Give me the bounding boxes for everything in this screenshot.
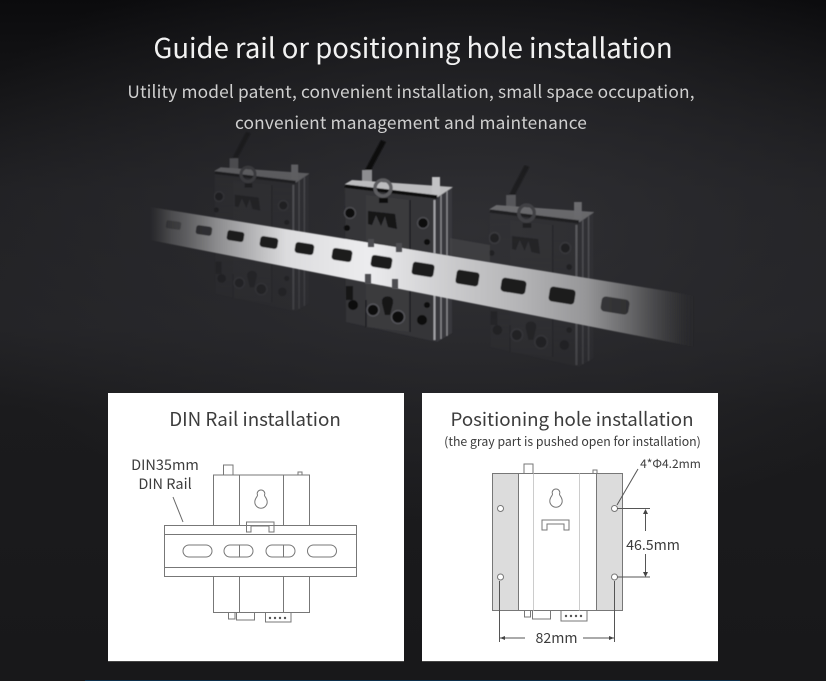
leader arrow — [617, 469, 638, 505]
label: DIN35mm DIN Rail: DIN35mm — [131, 454, 199, 475]
left router (dim) — [214, 132, 310, 311]
bottom blue edge line — [85, 680, 740, 681]
dimension: 82mm — [500, 581, 614, 648]
connector pins — [269, 617, 286, 619]
heading: Positioning hole installation: Positioning hole installation — [451, 405, 693, 432]
label: hole size: 4*Φ4.2mm — [640, 455, 701, 472]
diagram: router with mounting holes — [492, 464, 622, 621]
label: DIN35mm DIN Rail: DIN Rail — [138, 473, 192, 494]
heading: DIN Rail installation: DIN Rail installation — [169, 405, 341, 432]
panel: positioning hole installation — [422, 393, 718, 662]
title: Guide rail or positioning hole installation — [153, 26, 673, 66]
rail clips — [365, 239, 402, 289]
diagram: router on DIN rail — [164, 465, 356, 622]
center router — [344, 140, 453, 342]
shadow band behind rail — [450, 238, 490, 262]
connector pins — [565, 615, 582, 617]
leader line — [173, 497, 183, 522]
dimension: 46.5mm: 46.5mm — [626, 535, 680, 555]
right router (dim) — [489, 165, 594, 367]
subtitle: convenient management and maintenance — [235, 108, 587, 134]
subtitle: Utility model patent, convenient installation, small space occupation, — [127, 78, 695, 103]
dimension: 46.5mm — [617, 508, 680, 577]
DIN rail — [150, 207, 695, 347]
note: (the gray part is pushed open for installation) — [444, 432, 701, 450]
panel: DIN rail installation — [108, 393, 404, 662]
label: DIN35mm DIN Rail — [131, 454, 199, 494]
product photo: routers on DIN rail — [156, 132, 680, 366]
dimension: 82mm: 82mm — [535, 628, 578, 648]
subtitle — [127, 78, 695, 134]
